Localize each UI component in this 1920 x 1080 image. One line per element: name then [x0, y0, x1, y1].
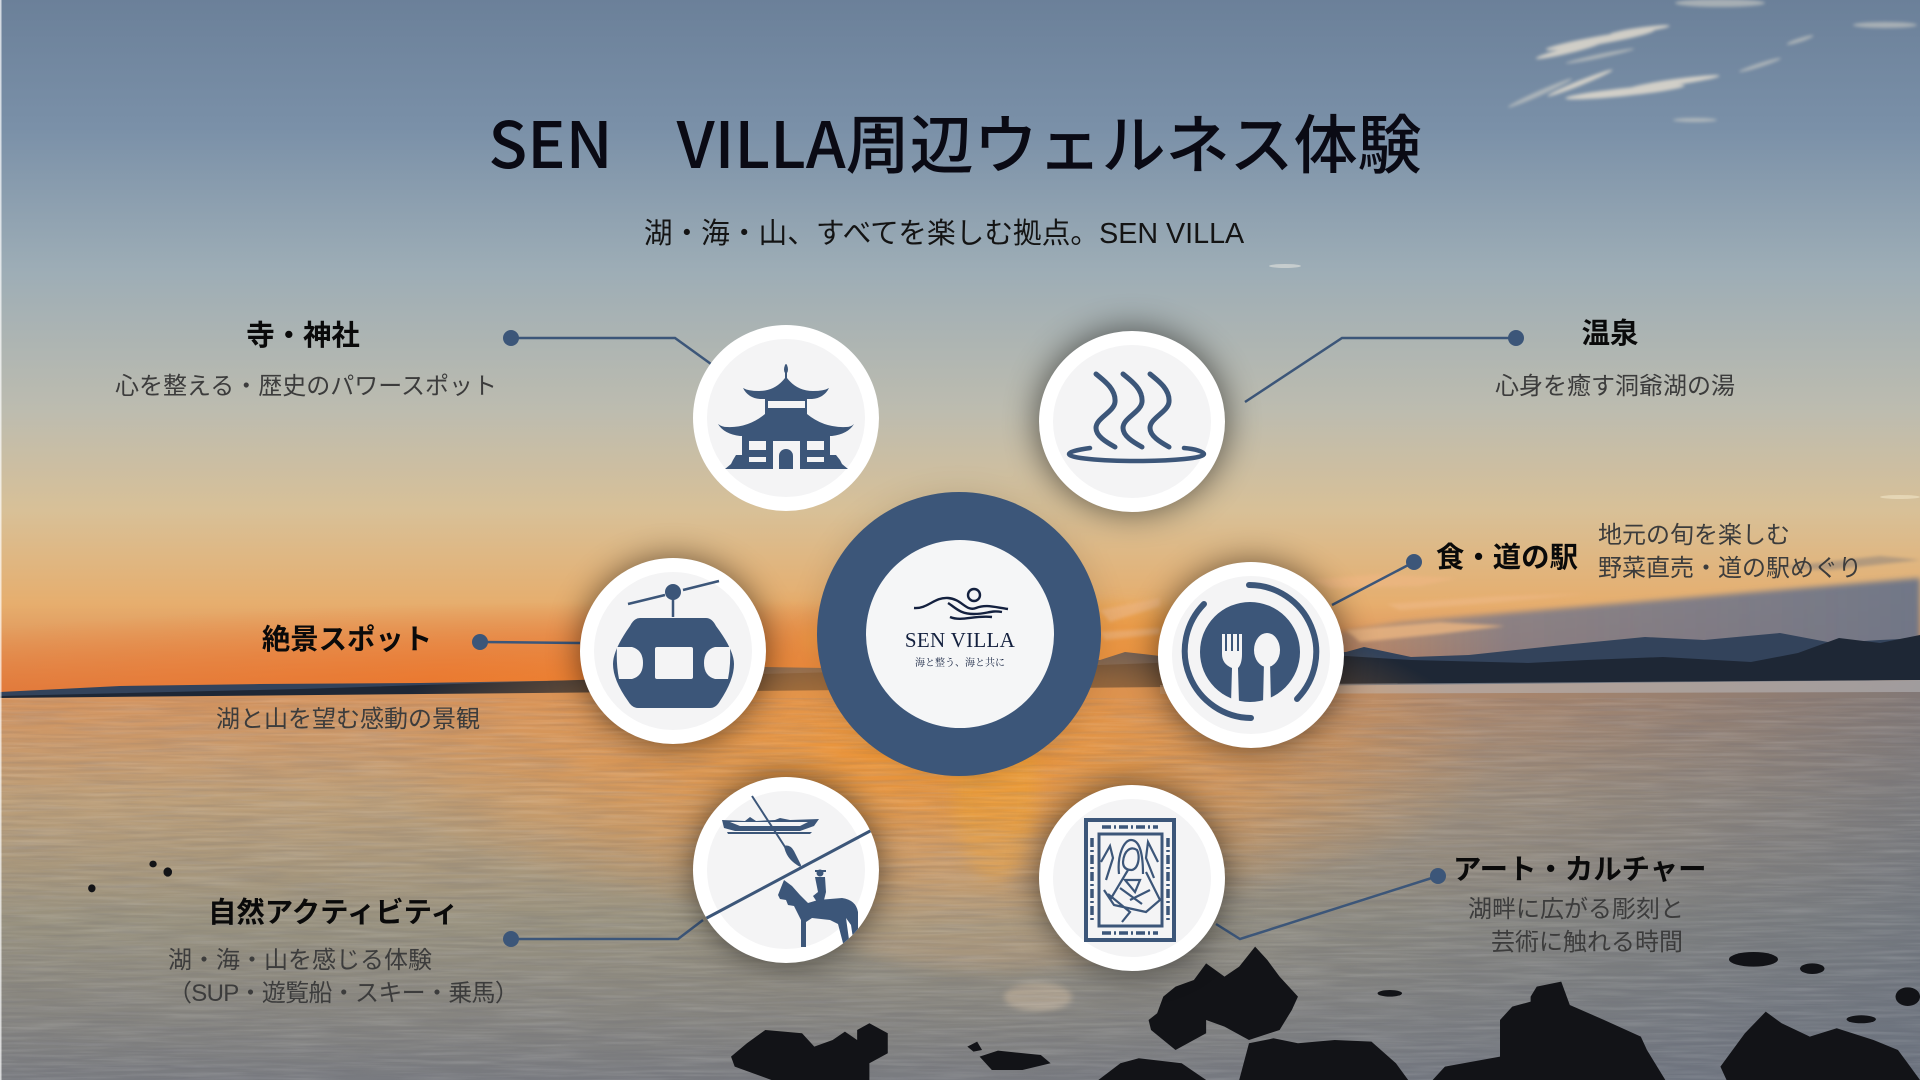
- high clouds: [1507, 0, 1917, 122]
- icon: gondola: [613, 581, 734, 708]
- label: nature activities: 自然アクティビティ: [208, 897, 459, 929]
- leader lines: [472, 330, 1524, 947]
- label: temples: 寺・神社: [246, 320, 360, 352]
- icon: framed portrait: [1086, 820, 1174, 940]
- label: scenic spots: 絶景スポット: [262, 624, 432, 656]
- logo wordmark: SEN VILLA: [905, 628, 1016, 652]
- center logo circle: [817, 492, 1101, 776]
- label: food and roadside station: 野菜直売・道の駅めぐり: [1598, 555, 1862, 582]
- icon: boat, paddle and horse rider: [703, 796, 872, 947]
- label: temples: [115, 320, 497, 400]
- icon: hot spring: [1069, 374, 1204, 461]
- label: nature activities: 湖・海・山を感じる体験: [168, 947, 432, 974]
- subtitle: 湖・海・山、すべてを楽しむ拠点。SEN VILLA: [644, 218, 1245, 250]
- icon: plate, fork and spoon: [1185, 585, 1316, 718]
- logo mark: sun and waves: [914, 589, 1008, 619]
- label: scenic spots: 湖と山を望む感動の景観: [216, 706, 480, 733]
- icon: temple: [718, 364, 854, 469]
- label: art and culture: 芸術に触れる時間: [1491, 929, 1683, 956]
- distant mountains: [0, 633, 1920, 702]
- label: hot spring: 心身を癒す洞爺湖の湯: [1495, 373, 1735, 400]
- label: nature activities: [168, 897, 518, 1007]
- label: temples: 心を整える・歴史のパワースポット: [115, 373, 497, 400]
- label: hot spring: [1495, 318, 1735, 400]
- panel: temples and shrines: [693, 325, 879, 511]
- panel: scenic spots: [580, 558, 766, 744]
- circle shadows: [579, 328, 1345, 972]
- foreground rocks: [88, 861, 1920, 1080]
- label: art and culture: [1453, 854, 1707, 956]
- label: art and culture: アート・カルチャー: [1453, 854, 1707, 886]
- panel: food and roadside station: [1158, 562, 1344, 748]
- label: nature activities: （SUP・遊覧船・スキー・乗馬）: [168, 980, 518, 1007]
- panel: hot spring: [1039, 331, 1225, 512]
- label: food and roadside station: [1436, 522, 1862, 582]
- label: food and roadside station: 地元の旬を楽しむ: [1598, 522, 1790, 549]
- panel: art and culture: [1039, 785, 1225, 971]
- label: art and culture: 湖畔に広がる彫刻と: [1468, 896, 1684, 923]
- label: scenic spots: [216, 624, 480, 733]
- label: hot spring: 温泉: [1582, 318, 1638, 350]
- logo tagline: 海と整う、海と共に: [915, 656, 1005, 669]
- panel: nature activities: [693, 777, 879, 963]
- label: food and roadside station: 食・道の駅: [1436, 542, 1578, 574]
- title: SEN VILLA周辺ウェルネス体験: [488, 95, 1422, 187]
